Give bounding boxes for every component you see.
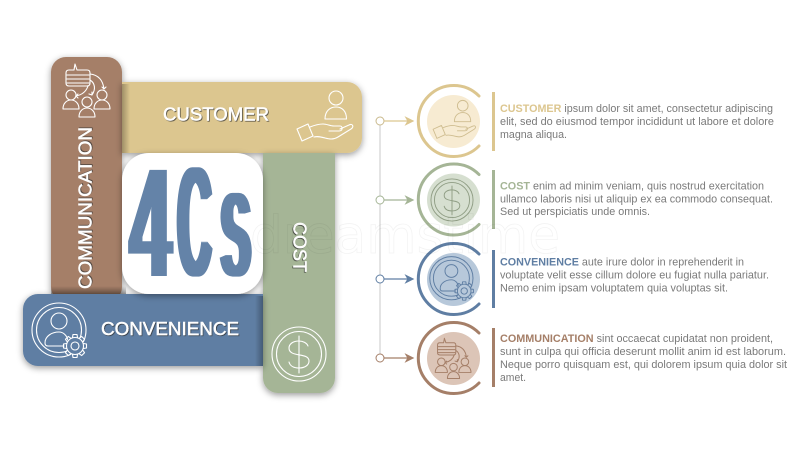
timeline connector [376,117,413,362]
text block: cost [492,170,773,229]
icon: communication [63,64,110,117]
text block: convenience [492,250,769,308]
arrow: communication [384,354,413,362]
text block: customer: CUSTOMER ipsum dolor sit amet, consectetur adipiscing [500,103,773,115]
text block: cost: ullamco laboris nisi ut aliquip ex ea commodo consequat. [500,194,773,206]
icon: dollar coin [272,327,326,381]
panel: cost band [263,153,335,393]
text: s [220,132,251,311]
label: cost: COST [290,222,310,272]
step icon: customer [418,86,480,156]
text block: communication: Neque porro quisquam est, qui dolorem ipsum quia dolor sit [500,359,787,371]
step icon: communication [418,322,480,393]
icon: user with gear [32,303,86,358]
text block: communication: COMMUNICATION sint occaecat cupidatat non proident, [500,333,773,345]
label: customer: CUSTOMER [163,104,269,124]
panel: convenience band [23,286,263,366]
text block: customer: elit, sed do eiusmod tempor incididunt ut labore et dolore [500,116,774,128]
text block: communication: amet. [500,372,526,384]
panel: communication band [51,57,122,302]
step icon: convenience [418,243,480,314]
arrow: convenience [384,276,413,282]
text block: cost: COST enim ad minim veniam, quis nostrud exercitation [500,180,764,192]
label: communication: COMMUNICATION [76,127,96,289]
arrow: cost [384,196,413,204]
arrow: customer [384,118,413,124]
text block: customer [492,92,774,151]
text block: communication [492,328,787,387]
text block: convenience: voluptate velit esse cillum dolore eu fugiat nulla pariatur. [500,270,769,282]
center tile: 4Cs: C [178,132,211,311]
icon: hand with customer [297,91,353,141]
center tile: 4Cs: 4 [130,133,171,312]
center tile: 4Cs [122,132,263,312]
text block: cost: Sed ut perspiciatis unde omnis. [500,206,650,218]
step icon: cost [418,164,480,235]
text block: customer: magna aliqua. [500,129,567,141]
watermark: dreamstime [250,206,560,266]
text block: communication: sunt in culpa qui officia deserunt mollit anim id est laborum. [500,346,786,358]
text block: convenience: CONVENIENCE aute irure dolor in reprehenderit in [500,256,744,268]
panel: customer band [122,82,362,153]
text block: convenience: Nemo enim ipsam voluptatem quia voluptas sit. [500,282,728,294]
label: convenience: CONVENIENCE [101,319,239,339]
